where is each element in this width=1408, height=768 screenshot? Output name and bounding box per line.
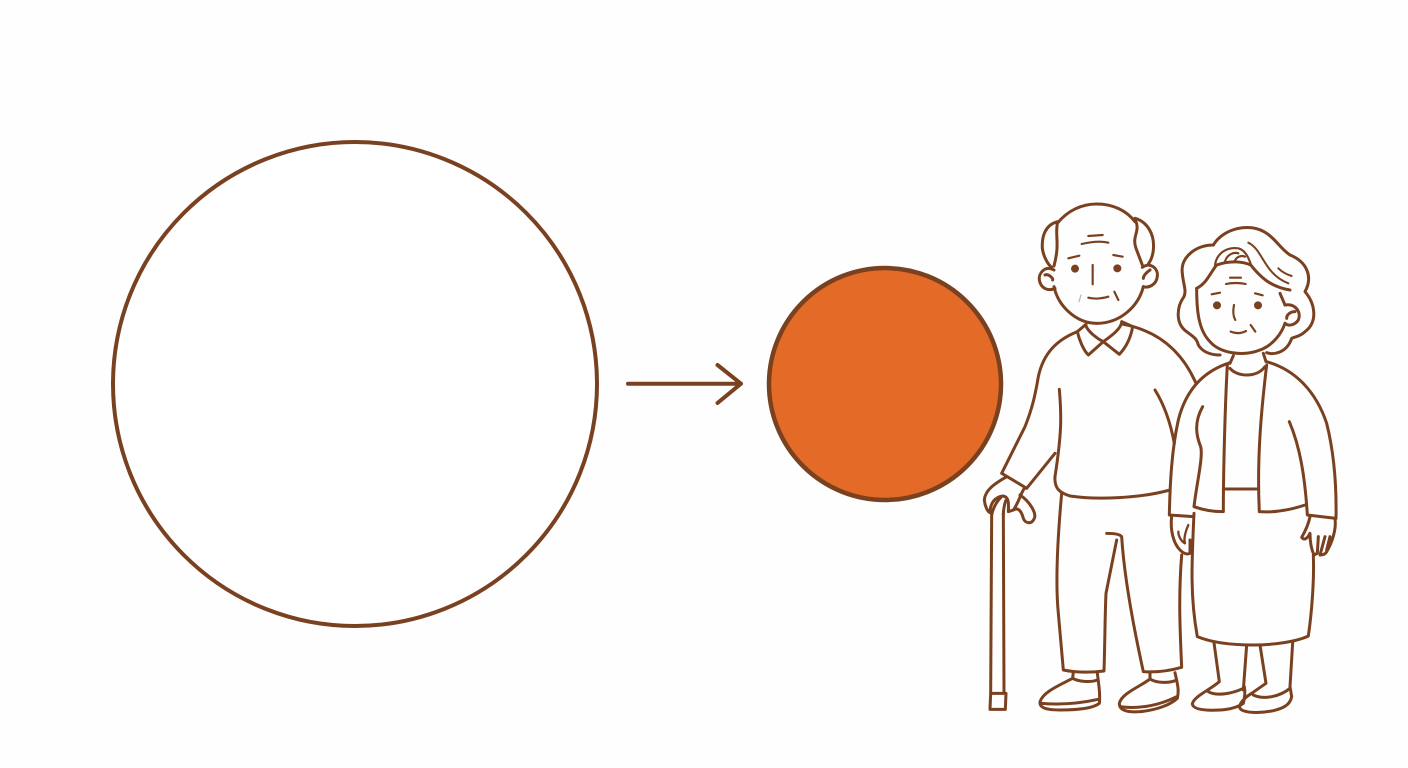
- elderly woman hands: [1171, 516, 1335, 555]
- hand on cane handle: [984, 477, 1035, 523]
- elderly man legs and shoes: [990, 493, 1182, 712]
- arrow pointing right: [628, 365, 741, 403]
- small orange circle: [769, 268, 1001, 500]
- elderly man upper body: [1002, 204, 1196, 498]
- elderly woman upper body: [1169, 227, 1336, 518]
- icon: elderly couple: [984, 204, 1336, 712]
- large empty circle: [113, 142, 597, 626]
- elderly woman skirt and shoes: [1192, 513, 1314, 712]
